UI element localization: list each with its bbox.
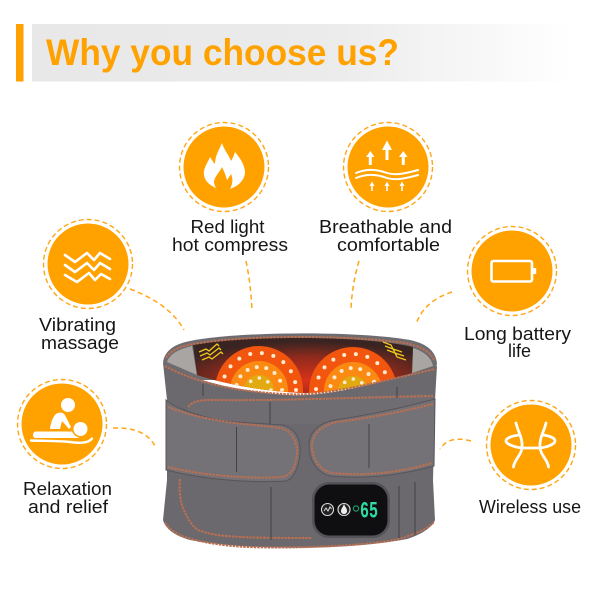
right heat pad [309,347,395,393]
title: Why you choose us? [46,32,399,73]
connector: wireless [440,439,471,449]
panel: relaxation and relief [18,380,112,517]
icon: flame [180,122,268,212]
icon: battery [468,226,556,316]
connector: red light [246,261,252,311]
label: long battery: Long battery [464,324,571,344]
belt back rim [163,333,437,380]
header: title band [32,24,572,82]
lower belt stitching [180,479,312,538]
icon: waist [486,400,576,490]
belt seams [203,384,415,540]
right strap [309,399,435,477]
temperature readout: 65 [360,498,378,524]
label: massage: massage [41,333,119,353]
belt body [163,363,437,548]
panel: red light hot compress [172,122,288,255]
product: lumbar belt [163,332,437,548]
connector: breathable [351,261,359,309]
belt inner lining [167,346,433,375]
icon: arrows and waves [344,122,432,212]
label: vibrating: Vibrating [39,315,116,335]
heat button [338,504,350,516]
yellow vibration marks [199,342,406,360]
vibration button [322,504,334,516]
heated mesh panel [193,338,413,393]
header: accent bar [16,24,24,82]
rim stitching [165,366,435,394]
label: breathable and: Breathable and [319,217,452,237]
panel: breathable and comfortable [319,122,452,255]
left strap [166,400,300,482]
connector: vibrating [130,289,184,330]
status dot [353,506,359,511]
label: red light: Red light [190,217,264,237]
label: relaxation: Relaxation [23,479,112,499]
label: life: life [508,341,531,361]
connector: relaxation [113,428,155,446]
icon: massage figure [18,380,106,468]
label: and relief: and relief [28,497,109,517]
label: comfortable: comfortable [337,235,440,255]
label: hot compress: hot compress [172,235,288,255]
upper strap [187,394,433,424]
control panel [312,482,390,538]
left heat pad [216,346,303,393]
panel: wireless use [479,400,581,517]
icon: vibration waves [44,220,132,308]
panel: vibrating massage [39,220,132,353]
label: wireless use: Wireless use [479,497,581,517]
connector: battery [416,292,452,324]
panel: long battery life [464,226,571,361]
